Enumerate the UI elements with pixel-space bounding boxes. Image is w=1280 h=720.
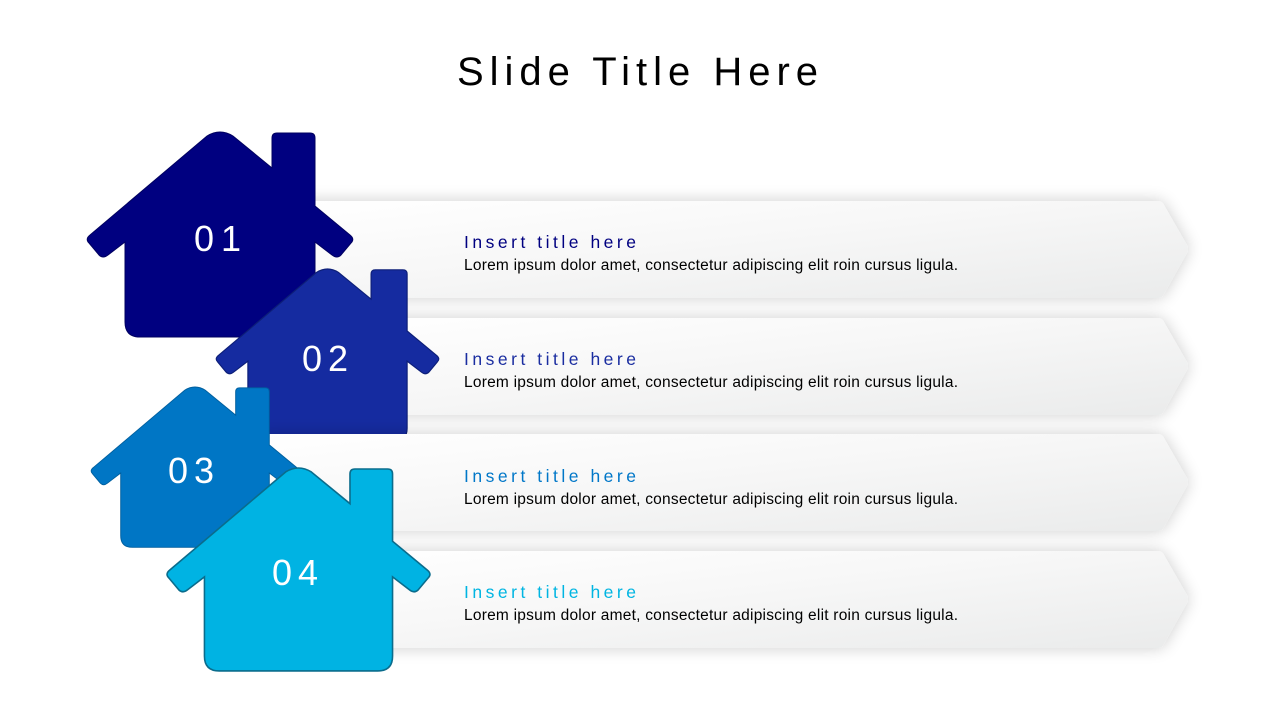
house 4 — [167, 468, 430, 671]
panel 4 text — [464, 582, 958, 624]
number 03: 03 — [168, 450, 214, 491]
panel 3 text — [464, 466, 958, 508]
panel 1: ribbon — [300, 201, 1188, 298]
panel 3 body: Lorem ipsum dolor amet, consectetur adipiscing elit roin cursus ligula. — [464, 491, 958, 508]
panel 2: ribbon — [335, 318, 1188, 415]
panel 4: ribbon — [320, 551, 1188, 648]
panel 3 heading: Insert title here — [464, 466, 636, 486]
house 3 — [91, 387, 299, 547]
house 2 — [216, 269, 439, 441]
number 01: 01 — [194, 218, 241, 259]
panel 1 heading: Insert title here — [464, 232, 636, 252]
panel 2 heading: Insert title here — [464, 349, 636, 369]
title: Slide Title Here — [457, 50, 818, 94]
number 04: 04 — [272, 552, 318, 593]
panel 2 body: Lorem ipsum dolor amet, consectetur adipiscing elit roin cursus ligula. — [464, 374, 958, 391]
panel 1 body: Lorem ipsum dolor amet, consectetur adipiscing elit roin cursus ligula. — [464, 257, 958, 274]
number 02: 02 — [302, 338, 348, 379]
panel 4 heading: Insert title here — [464, 582, 636, 602]
house 1 — [87, 132, 353, 337]
panel 4 body: Lorem ipsum dolor amet, consectetur adipiscing elit roin cursus ligula. — [464, 607, 958, 624]
panel 3: ribbon — [262, 434, 1188, 531]
panel 2 text — [464, 349, 958, 391]
panel 1 text — [464, 232, 958, 274]
